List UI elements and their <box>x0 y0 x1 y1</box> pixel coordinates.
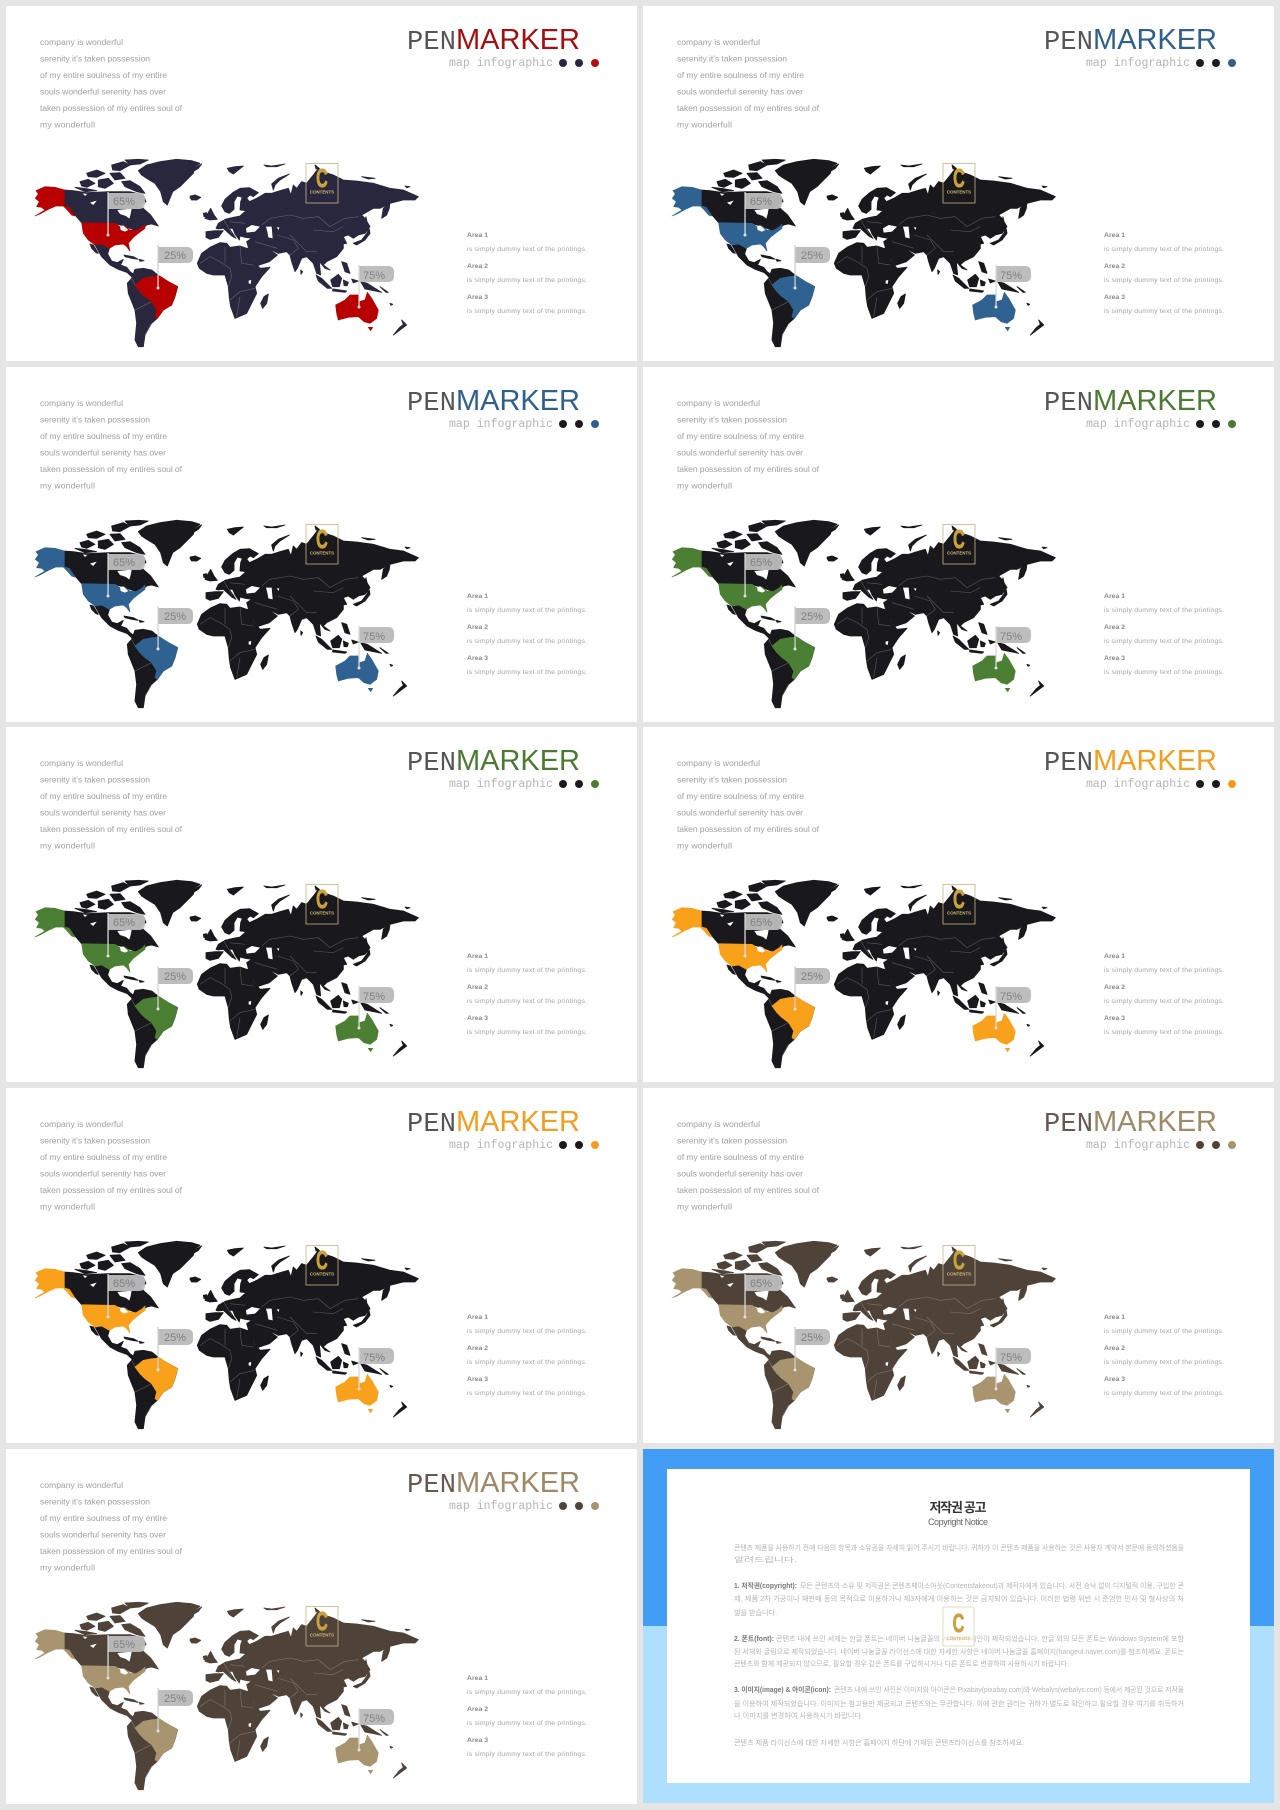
logo watermark: C <box>953 1608 965 1638</box>
legend: is simply dummy text of the printings. <box>467 998 587 1005</box>
legend <box>1104 1314 1224 1397</box>
world map <box>672 1241 1055 1429</box>
legend: is simply dummy text of the printings. <box>467 1689 587 1696</box>
title: MARKER <box>456 385 580 417</box>
notice body text: 알려드립니다. <box>734 1555 797 1564</box>
title: PEN <box>1044 1110 1093 1140</box>
intro text: serenity it's taken possession <box>677 54 787 64</box>
legend: Area 1 <box>467 1314 488 1321</box>
intro text <box>677 398 820 490</box>
notice body text: 을 이용하여 제작되었습니다. 이미지는 참고용만 제공되고 콘텐츠와는 무관합니다. 이에 관한 권리는 귀하가 별도로 확인하고 필요할 경우 여기를 취득하거 <box>734 1699 1184 1708</box>
logo watermark: C <box>316 1245 328 1275</box>
percentage flags: 75% <box>363 1713 385 1725</box>
intro text: company is wonderful <box>677 758 760 768</box>
title <box>1044 385 1217 419</box>
notice subheading: Copyright Notice <box>928 1517 988 1527</box>
legend: Area 1 <box>467 1675 488 1682</box>
logo watermark: C <box>316 884 328 914</box>
intro text: taken possession of my entires soul of <box>677 824 820 834</box>
intro text: company is wonderful <box>677 1119 760 1129</box>
title: PEN <box>407 389 456 419</box>
legend: is simply dummy text of the printings. <box>467 1720 587 1727</box>
legend: is simply dummy text of the printings. <box>1104 967 1224 974</box>
percentage flags: 65% <box>113 196 135 208</box>
percentage flags <box>106 192 394 308</box>
legend: Area 1 <box>1104 232 1125 239</box>
logo watermark: CONTENTS <box>947 911 971 916</box>
percentage flags: 75% <box>1000 1352 1022 1364</box>
world map <box>35 1602 418 1790</box>
intro text: of my entire soulness of my entire <box>40 431 167 441</box>
logo watermark: CONTENTS <box>310 1632 334 1638</box>
intro text: serenity it's taken possession <box>40 414 150 424</box>
intro text: of my entire soulness of my entire <box>40 1513 167 1523</box>
subtitle: map infographic <box>449 778 553 791</box>
legend: Area 3 <box>1104 655 1125 662</box>
title: MARKER <box>456 24 580 56</box>
notice body text: 3. 이미지(image) & 아이콘(icon): <box>734 1685 831 1694</box>
intro text <box>40 758 183 851</box>
legend: is simply dummy text of the printings. <box>467 1390 587 1397</box>
percentage flags: 75% <box>1000 631 1022 643</box>
title: MARKER <box>1093 24 1217 56</box>
legend: Area 2 <box>467 1345 488 1352</box>
notice body text: 된 서체와 굴림으로 제작되었습니다. 네이버 나눔글꼴 라이선스에 대한 자세한 사항은 네이버 나눔글꼴 홈페이지(hangeul.naver.com)를 참조하세요. 폰트는 <box>734 1647 1185 1656</box>
intro text: serenity it's taken possession <box>40 1496 150 1506</box>
percentage flags: 25% <box>801 250 823 262</box>
subtitle: map infographic <box>449 1500 553 1513</box>
legend <box>1104 593 1224 676</box>
legend: is simply dummy text of the printings. <box>467 1359 587 1366</box>
intro text: souls wonderful serenity has over <box>677 86 803 96</box>
legend <box>467 1675 587 1758</box>
subtitle: map infographic <box>449 57 553 70</box>
percentage flags: 75% <box>1000 270 1022 282</box>
legend: Area 3 <box>1104 1015 1125 1022</box>
percentage flags <box>106 553 394 669</box>
percentage flags: 65% <box>113 1278 135 1290</box>
legend: Area 3 <box>467 294 488 301</box>
legend: Area 1 <box>1104 1314 1125 1321</box>
legend: Area 2 <box>467 1706 488 1713</box>
intro text <box>40 37 183 130</box>
intro text: my wonderfull <box>677 1202 732 1212</box>
legend: is simply dummy text of the printings. <box>467 1751 587 1758</box>
legend: is simply dummy text of the printings. <box>1104 246 1224 253</box>
panel: copyright notice <box>643 1449 1274 1803</box>
intro text: taken possession of my entires soul of <box>677 1185 820 1195</box>
color dots <box>559 780 599 788</box>
title: MARKER <box>1093 745 1217 777</box>
legend: is simply dummy text of the printings. <box>1104 1328 1224 1335</box>
subtitle: map infographic <box>1086 418 1190 431</box>
legend: is simply dummy text of the printings. <box>1104 308 1224 315</box>
title <box>1044 745 1217 779</box>
panel: blue map slide A <box>643 6 1274 361</box>
notice body text: 콘텐츠 내에 쓰인 사진은 이미지와 아이콘은 Pixabay(pixabay.com)와 Webalys(webalys.com) 등에서 제공된 것으로 저작물 <box>834 1685 1185 1694</box>
title <box>407 745 580 779</box>
title: PEN <box>407 1110 456 1140</box>
legend: is simply dummy text of the printings. <box>467 607 587 614</box>
color dots <box>559 1502 599 1510</box>
legend: Area 2 <box>467 624 488 631</box>
subtitle: map infographic <box>449 418 553 431</box>
legend: is simply dummy text of the printings. <box>1104 1390 1224 1397</box>
legend: Area 2 <box>1104 624 1125 631</box>
logo watermark: C <box>953 524 965 554</box>
legend <box>1104 232 1224 315</box>
world map <box>35 520 418 707</box>
world map <box>35 1241 418 1429</box>
percentage flags: 65% <box>750 196 772 208</box>
percentage flags <box>106 1635 394 1752</box>
intro text: serenity it's taken possession <box>677 414 787 424</box>
notice body text <box>734 1543 1185 1747</box>
legend: Area 3 <box>467 1737 488 1744</box>
logo watermark <box>943 163 975 203</box>
percentage flags: 75% <box>363 270 385 282</box>
title: MARKER <box>456 1106 580 1138</box>
percentage flags <box>744 1274 1031 1390</box>
intro text <box>40 398 183 490</box>
panel: blue map slide B <box>6 367 637 722</box>
legend: is simply dummy text of the printings. <box>1104 1029 1224 1036</box>
intro text: company is wonderful <box>677 398 760 408</box>
intro text: taken possession of my entires soul of <box>40 103 183 113</box>
legend: Area 1 <box>467 593 488 600</box>
notice heading: 저작권 공고 <box>930 1500 987 1515</box>
legend: Area 1 <box>467 232 488 239</box>
logo watermark: CONTENTS <box>947 550 971 555</box>
percentage flags: 25% <box>164 611 186 623</box>
percentage flags: 75% <box>363 1352 385 1364</box>
logo watermark <box>306 163 338 203</box>
intro text: serenity it's taken possession <box>40 775 150 785</box>
legend: is simply dummy text of the printings. <box>467 638 587 645</box>
color dots <box>559 420 599 428</box>
legend: is simply dummy text of the printings. <box>467 967 587 974</box>
world map <box>672 159 1055 347</box>
logo watermark <box>943 1245 975 1285</box>
percentage flags: 65% <box>750 557 772 569</box>
intro text: souls wonderful serenity has over <box>40 447 166 457</box>
legend <box>1104 953 1224 1036</box>
intro text: of my entire soulness of my entire <box>40 791 167 801</box>
intro text <box>677 1119 820 1212</box>
legend: is simply dummy text of the printings. <box>467 669 587 676</box>
subtitle: map infographic <box>449 1139 553 1152</box>
intro text: souls wonderful serenity has over <box>677 808 803 818</box>
panel: green map slide B <box>6 727 637 1082</box>
logo watermark <box>943 1607 974 1646</box>
intro text: my wonderfull <box>677 480 732 490</box>
title: MARKER <box>1093 1106 1217 1138</box>
legend: is simply dummy text of the printings. <box>467 246 587 253</box>
legend: is simply dummy text of the printings. <box>1104 669 1224 676</box>
intro text: souls wonderful serenity has over <box>40 1530 166 1540</box>
percentage flags: 65% <box>113 1639 135 1651</box>
logo watermark: CONTENTS <box>946 1636 971 1641</box>
color dots <box>1196 1141 1236 1149</box>
legend: is simply dummy text of the printings. <box>1104 998 1224 1005</box>
notice body text: 1. 저작권(copyright): <box>734 1581 797 1590</box>
legend: Area 1 <box>1104 593 1125 600</box>
intro text: taken possession of my entires soul of <box>40 824 183 834</box>
title: MARKER <box>1093 385 1217 417</box>
legend <box>467 593 587 676</box>
percentage flags <box>744 913 1031 1030</box>
title <box>407 24 580 58</box>
logo watermark: CONTENTS <box>310 1272 334 1276</box>
notice body text: 콘텐츠 제품 라이선스에 대한 자세한 사항은 홈페이지 하단에 기재된 콘텐츠라이선스를 참조하세요. <box>734 1738 1024 1747</box>
intro text: souls wonderful serenity has over <box>677 447 803 457</box>
title: PEN <box>1044 749 1093 779</box>
intro text <box>40 1119 183 1212</box>
intro text: taken possession of my entires soul of <box>40 1185 183 1195</box>
legend: is simply dummy text of the printings. <box>467 1029 587 1036</box>
intro text <box>677 37 820 130</box>
two-tone blue background <box>643 1449 1274 1803</box>
logo watermark: C <box>316 524 328 554</box>
panel: orange map slide A <box>643 727 1274 1082</box>
percentage flags: 75% <box>363 991 385 1003</box>
title: MARKER <box>456 745 580 777</box>
color dots <box>1196 420 1236 428</box>
logo watermark: C <box>953 884 965 914</box>
color dots <box>1196 780 1236 788</box>
legend: Area 3 <box>1104 294 1125 301</box>
logo watermark: C <box>953 1245 965 1275</box>
notice body text: 벌을 받습니다. <box>734 1608 777 1617</box>
intro text: of my entire soulness of my entire <box>677 70 804 80</box>
intro text: taken possession of my entires soul of <box>677 464 820 474</box>
title <box>1044 24 1217 58</box>
panel: tan map slide B <box>6 1449 637 1804</box>
percentage flags: 65% <box>113 917 135 929</box>
legend: Area 2 <box>467 263 488 270</box>
intro text: souls wonderful serenity has over <box>677 1168 803 1178</box>
intro text: souls wonderful serenity has over <box>40 86 166 96</box>
percentage flags: 75% <box>363 631 385 643</box>
legend: Area 1 <box>1104 953 1125 960</box>
intro text: my wonderfull <box>40 120 95 130</box>
logo watermark: CONTENTS <box>310 550 334 555</box>
percentage flags: 65% <box>113 557 135 569</box>
intro text: serenity it's taken possession <box>40 54 150 64</box>
notice body text: 모든 콘텐츠의 소유 및 저작권은 콘텐츠페이스아웃(Contentsfakeout)과 제작자에게 있습니다. 사전 승낙 없이 디지털적 이용, 구입한 콘 <box>800 1581 1185 1590</box>
title <box>1044 1106 1217 1140</box>
logo watermark <box>306 1606 338 1646</box>
legend <box>467 232 587 315</box>
logo watermark: CONTENTS <box>310 911 334 916</box>
intro text: of my entire soulness of my entire <box>677 791 804 801</box>
intro text: company is wonderful <box>40 1480 123 1490</box>
percentage flags <box>744 553 1031 669</box>
panel: orange map slide B <box>6 1088 637 1443</box>
panel: green map slide A <box>643 367 1274 722</box>
title <box>407 385 580 419</box>
intro text: company is wonderful <box>40 758 123 768</box>
percentage flags: 25% <box>801 971 823 983</box>
legend: is simply dummy text of the printings. <box>1104 607 1224 614</box>
intro text: taken possession of my entires soul of <box>40 464 183 474</box>
title <box>407 1106 580 1140</box>
percentage flags: 75% <box>1000 991 1022 1003</box>
notice body text: 콘텐츠 제품을 사용하기 전에 다음의 항목과 소유권을 자세히 읽어 주시기 바랍니다. 귀하가 이 콘텐츠 제품을 사용하는 것은 사용자 계약서 본문에 동의하셨음을 <box>734 1543 1185 1552</box>
intro text <box>677 758 820 851</box>
legend: Area 3 <box>467 655 488 662</box>
panel: tan map slide A <box>643 1088 1274 1443</box>
intro text: company is wonderful <box>40 1119 123 1129</box>
world map <box>35 881 418 1068</box>
logo watermark: C <box>316 1606 328 1636</box>
percentage flags: 25% <box>801 1332 823 1344</box>
subtitle: map infographic <box>1086 778 1190 791</box>
notice body text: 콘텐츠와 함께 제공되지 않으므로, 필요할 경우 같은 폰트를 구입하시거나 다른 폰트로 변경하여 사용하시기 바랍니다. <box>734 1659 1069 1668</box>
intro text: of my entire soulness of my entire <box>40 70 167 80</box>
intro text: my wonderfull <box>40 841 95 851</box>
percentage flags: 25% <box>164 971 186 983</box>
world map <box>672 881 1055 1068</box>
intro text: taken possession of my entires soul of <box>40 1546 183 1556</box>
logo watermark <box>306 524 338 564</box>
notice body text: 콘텐츠 내에 쓰인 서체는 한글 폰트는 네이버 나눔글꼴의 서체와 디자인이 제작되었습니다. 한글 외의 모든 폰트는 Windows System에 포함 <box>776 1634 1185 1643</box>
notice body text: 제, 제품 2차 가공이나 재판매 등의 목적으로 이용하거나 제3자에게 이용하는 것은 금지되어 있습니다. 이러한 법령 위반 시 준엄한 민사 및 형사상의 처 <box>734 1594 1184 1603</box>
color dots <box>559 1141 599 1149</box>
legend: Area 2 <box>1104 984 1125 991</box>
color dots <box>1196 59 1236 67</box>
intro text: my wonderfull <box>40 1202 95 1212</box>
subtitle: map infographic <box>1086 1139 1190 1152</box>
percentage flags: 25% <box>801 611 823 623</box>
color dots <box>559 59 599 67</box>
title: PEN <box>407 749 456 779</box>
legend: is simply dummy text of the printings. <box>1104 638 1224 645</box>
world map <box>35 159 418 347</box>
legend: Area 1 <box>467 953 488 960</box>
intro text: my wonderfull <box>677 120 732 130</box>
intro text: serenity it's taken possession <box>677 1136 787 1146</box>
percentage flags <box>744 192 1031 308</box>
title: PEN <box>407 28 456 58</box>
intro text: my wonderfull <box>40 1562 95 1572</box>
notice body text: 2. 폰트(font): <box>734 1635 774 1643</box>
legend: is simply dummy text of the printings. <box>467 1328 587 1335</box>
intro text: company is wonderful <box>40 37 123 47</box>
subtitle: map infographic <box>1086 57 1190 70</box>
percentage flags: 65% <box>750 917 772 929</box>
intro text: serenity it's taken possession <box>677 775 787 785</box>
title: MARKER <box>456 1467 580 1499</box>
percentage flags: 25% <box>164 250 186 262</box>
intro text <box>40 1480 183 1572</box>
percentage flags <box>106 913 394 1030</box>
legend <box>467 1314 587 1397</box>
intro text: my wonderfull <box>40 480 95 490</box>
legend <box>467 953 587 1036</box>
legend: Area 2 <box>1104 263 1125 270</box>
notice body text: 나 이미지를 변경하여 사용하시기 바랍니다. <box>734 1711 863 1720</box>
logo watermark <box>943 884 975 924</box>
percentage flags: 25% <box>164 1693 186 1705</box>
legend: is simply dummy text of the printings. <box>1104 277 1224 284</box>
intro text: serenity it's taken possession <box>40 1136 150 1146</box>
title <box>407 1467 580 1501</box>
intro text: souls wonderful serenity has over <box>40 808 166 818</box>
legend: Area 2 <box>467 984 488 991</box>
logo watermark <box>306 1245 338 1285</box>
title: PEN <box>1044 389 1093 419</box>
logo watermark <box>943 524 975 564</box>
intro text: of my entire soulness of my entire <box>677 431 804 441</box>
intro text: taken possession of my entires soul of <box>677 103 820 113</box>
logo watermark: CONTENTS <box>310 190 334 194</box>
percentage flags: 65% <box>750 1278 772 1290</box>
world map <box>672 520 1055 707</box>
legend: is simply dummy text of the printings. <box>467 308 587 315</box>
logo watermark: C <box>316 163 328 193</box>
intro text: company is wonderful <box>40 398 123 408</box>
legend: is simply dummy text of the printings. <box>1104 1359 1224 1366</box>
title: PEN <box>407 1471 456 1501</box>
logo watermark: C <box>953 163 965 193</box>
logo watermark: CONTENTS <box>947 190 971 194</box>
legend: Area 3 <box>467 1015 488 1022</box>
title: PEN <box>1044 28 1093 58</box>
intro text: my wonderfull <box>677 841 732 851</box>
percentage flags <box>106 1274 394 1390</box>
percentage flags: 25% <box>164 1332 186 1344</box>
logo watermark: CONTENTS <box>947 1272 971 1276</box>
white notice card <box>667 1469 1250 1783</box>
intro text: of my entire soulness of my entire <box>40 1152 167 1162</box>
logo watermark <box>306 884 338 924</box>
intro text: of my entire soulness of my entire <box>677 1152 804 1162</box>
legend: Area 2 <box>1104 1345 1125 1352</box>
legend: Area 3 <box>467 1376 488 1383</box>
legend: Area 3 <box>1104 1376 1125 1383</box>
intro text: souls wonderful serenity has over <box>40 1168 166 1178</box>
panel: red map slide <box>6 6 637 361</box>
legend: is simply dummy text of the printings. <box>467 277 587 284</box>
intro text: company is wonderful <box>677 37 760 47</box>
